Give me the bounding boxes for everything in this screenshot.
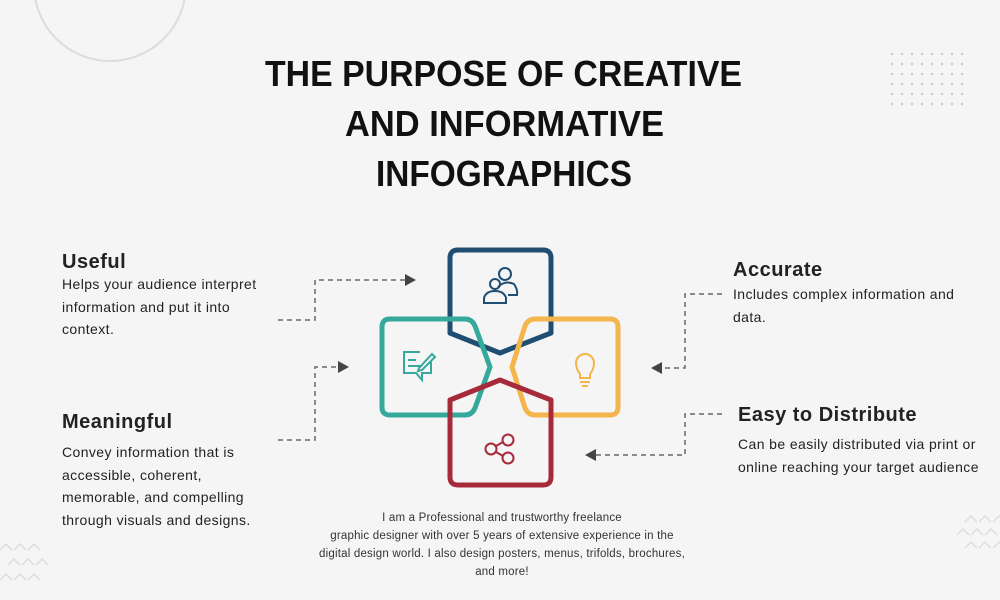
icon: chat edit xyxy=(404,352,435,380)
icon: bulb xyxy=(576,354,594,386)
text block: Meaningful: through visuals and designs. xyxy=(62,512,251,528)
text block: Meaningful: memorable, and compelling xyxy=(62,489,244,505)
text block: Accurate xyxy=(733,259,954,325)
text block: Accurate: Accurate xyxy=(733,259,823,281)
shape: teal left xyxy=(382,319,490,415)
footer text: and more! xyxy=(475,566,529,578)
text block: Useful: Helps your audience interpret xyxy=(62,276,256,292)
text block: Easy to Distribute: online reaching your target audience xyxy=(738,459,979,475)
text block: Easy to Distribute xyxy=(738,404,979,475)
text block: Useful: information and put it into xyxy=(62,299,230,315)
text block: Meaningful: Convey information that is xyxy=(62,444,234,460)
text block: Easy to Distribute: Can be easily distributed via print or xyxy=(738,436,976,452)
text block: Accurate: data. xyxy=(733,309,766,325)
arrows xyxy=(278,280,722,455)
text block: Meaningful: accessible, coherent, xyxy=(62,467,202,483)
text block: Useful: context. xyxy=(62,321,114,337)
text block: Meaningful: Meaningful xyxy=(62,411,173,433)
footer text: graphic designer with over 5 years of extensive experience in the xyxy=(330,530,674,542)
footer text: I am a Professional and trustworthy freelance xyxy=(382,512,622,524)
text block: Accurate: Includes complex information and xyxy=(733,286,954,302)
footer text: digital design world. I also design posters, menus, trifolds, brochures, xyxy=(319,548,685,560)
shape: orange right xyxy=(512,319,618,415)
wave decorations xyxy=(0,516,1000,580)
footer text xyxy=(319,512,685,578)
icon: share nodes xyxy=(486,434,514,464)
title: INFOGRAPHICS xyxy=(376,153,632,194)
text block: Meaningful xyxy=(62,411,251,528)
title: THE PURPOSE OF CREATIVE xyxy=(265,53,742,94)
decorative circle xyxy=(34,0,186,61)
text block: Useful: Useful xyxy=(62,251,126,273)
icon: people xyxy=(484,268,517,303)
text block: Easy to Distribute: Easy to Distribute xyxy=(738,404,917,426)
text block: Useful xyxy=(62,251,256,337)
shape: blue top xyxy=(450,250,551,353)
diagram: four interlocking shapes xyxy=(382,250,618,485)
dot grid xyxy=(891,53,963,105)
title: AND INFORMATIVE xyxy=(345,103,664,144)
shape: red bottom xyxy=(450,380,551,485)
title xyxy=(265,53,742,194)
